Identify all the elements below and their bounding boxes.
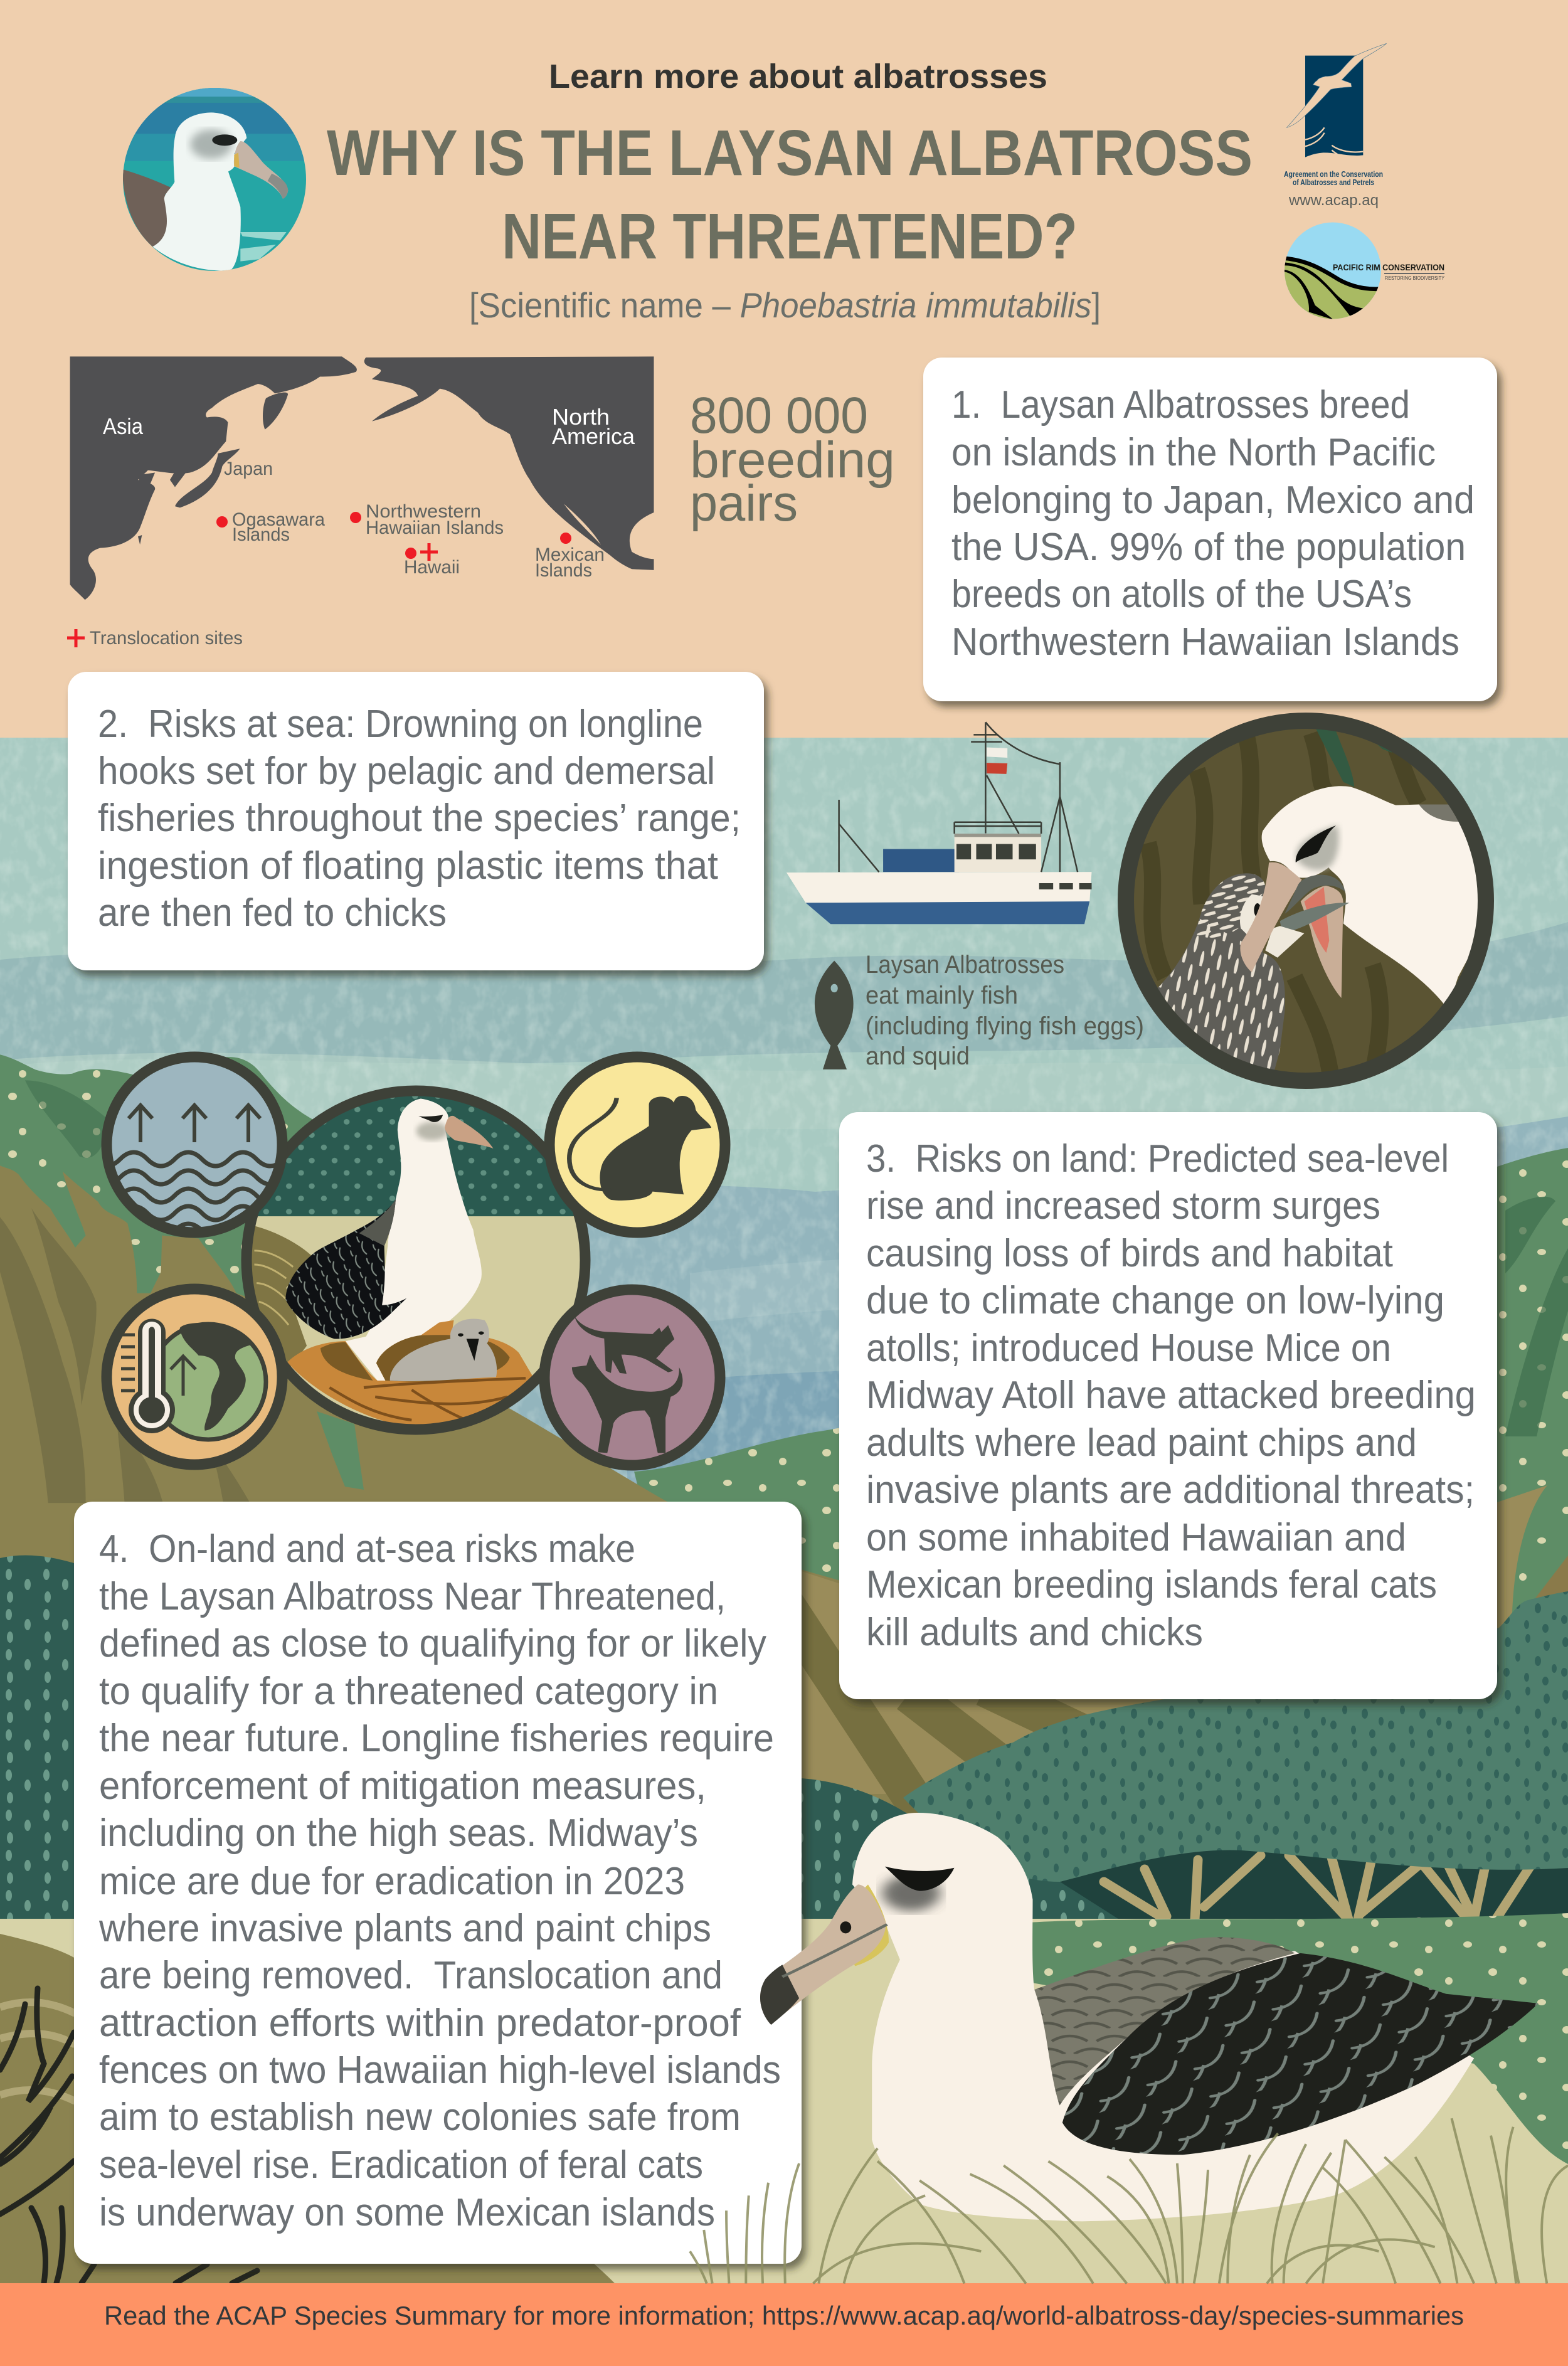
stat: breeding pairs: pairs (690, 475, 798, 532)
panel 3 text: atolls; introduced House Mice on (866, 1327, 1391, 1370)
map land (70, 356, 654, 600)
panel 2 text: ingestion of floating plastic items that (98, 844, 718, 888)
map legend: translocation sites: Translocation sites (90, 628, 243, 649)
map site: Mexican Islands (535, 533, 605, 581)
wing feathers (1062, 1953, 1539, 2155)
panel 3 text: Mexican breeding islands feral cats (866, 1563, 1437, 1606)
stat: breeding pairs: 800 000 (690, 387, 868, 444)
panel 4 text: aim to establish new colonies safe from (99, 2096, 741, 2139)
panel 1 text (951, 383, 1475, 664)
background: big teal dotted hill (903, 1591, 1568, 1882)
panel 3: risks on land (839, 1112, 1497, 1699)
panel 1 text: the USA. 99% of the population (951, 526, 1466, 569)
panel 4 text: sea-level rise. Eradication of feral cats (99, 2143, 703, 2187)
photo: albatross on water (121, 86, 307, 274)
bird eye (885, 1867, 954, 1891)
logo caption (1284, 169, 1383, 187)
footer bar (0, 2283, 1568, 2366)
logo: ACAP (1284, 43, 1387, 209)
bird body (852, 1813, 1474, 2221)
panel 3 text: on some inhabited Hawaiian and (866, 1516, 1406, 1559)
text: diet note: and squid (866, 1042, 970, 1070)
background: green drip under central circle (317, 1411, 364, 1490)
logo url: www.acap.aq (1288, 192, 1379, 209)
map site: Mexican Islands: Mexican (535, 544, 605, 565)
text: diet note: eat mainly fish (866, 982, 1018, 1009)
panel 3 text: adults where lead paint chips and (866, 1421, 1417, 1465)
panel 1 text: belonging to Japan, Mexico and (951, 479, 1475, 522)
heading: learn more: Learn more about albatrosses (549, 58, 1047, 95)
logo tagline: RESTORING BIODIVERSITY (1385, 275, 1445, 281)
panel 3 text: due to climate change on low-lying (866, 1279, 1444, 1322)
panel 2 text (98, 703, 741, 935)
background: tree trunks (1104, 1850, 1530, 1919)
map site: Northwestern Hawaiian Islands (350, 501, 504, 538)
text: diet note (866, 951, 1144, 1070)
panel 1 text: 1. Laysan Albatrosses breed (951, 383, 1410, 427)
panel 4 text: are being removed. Translocation and (99, 1954, 723, 1997)
background: sand header (0, 0, 1568, 738)
logo caption: Agreement on the Conservation (1284, 169, 1383, 179)
map label: North America: America (552, 423, 635, 449)
illustration: large albatross (760, 1813, 1539, 2221)
background: olive hill with black branches (0, 1932, 627, 2289)
background: pale ground (0, 1919, 1568, 2289)
panel 2: risks at sea (68, 672, 764, 970)
title: WHY IS THE LAYSAN ALBATROSS (327, 117, 1253, 189)
icon: mouse (549, 1057, 725, 1233)
logo: Pacific Rim Conservation (1285, 222, 1445, 322)
panel 4 text: is underway on some Mexican islands (99, 2191, 715, 2234)
map site: Northwestern Hawaiian Islands: Northwestern (366, 501, 481, 522)
panel 4 text (98, 1527, 781, 2234)
panel 4 text: defined as close to qualifying for or likely (99, 1622, 766, 1665)
icon: fish (815, 961, 854, 1069)
panel 4 text: where invasive plants and paint chips (98, 1907, 711, 1950)
icon: waves (114, 1150, 275, 1227)
logo caption: of Albatrosses and Petrels (1293, 178, 1374, 187)
title: NEAR THREATENED? (502, 200, 1078, 272)
panel 3 text: 3. Risks on land: Predicted sea-level (866, 1137, 1449, 1180)
panel 4 text: including on the high seas. Midway’s (99, 1812, 698, 1855)
illustration: central albatross on nest (238, 1079, 596, 1437)
background: green hill right (634, 1148, 1568, 1694)
map site: Hawaii: Hawaii (404, 557, 460, 578)
panel 2 text: hooks set for by pelagic and demersal (98, 750, 715, 793)
logo name: PACIFIC RIM CONSERVATION (1333, 262, 1444, 272)
bird mantle (1034, 1937, 1295, 2106)
panel 4 text: the near future. Longline fisheries require (99, 1717, 774, 1760)
text: diet note: Laysan Albatrosses (866, 951, 1064, 979)
map label: North America: North (552, 404, 610, 430)
background: brown striped hill (0, 1165, 1164, 1814)
bird beak (760, 1884, 889, 2025)
background: left dark green hillside (0, 1555, 125, 1920)
background: mid green bush (1029, 1913, 1568, 2164)
bird head shading (882, 1875, 940, 1911)
map site: Ogasawara Islands (216, 509, 325, 545)
bird wing (1062, 1953, 1539, 2155)
panel 3 text: invasive plants are additional threats; (866, 1468, 1475, 1512)
foreground: grass blades (690, 2118, 1568, 2283)
map site: Hawaii (404, 543, 460, 578)
illustration: adult feeding chick (1116, 709, 1499, 1091)
panel 4 text: fences on two Hawaiian high-level islands (99, 2049, 781, 2092)
panel 2 text: 2. Risks at sea: Drowning on longline (98, 703, 703, 746)
panel 4 text: to qualify for a threatened category in (99, 1670, 718, 1713)
map site: Mexican Islands: Islands (535, 560, 592, 581)
footer link text: Read the ACAP Species Summary for more information; https://www.acap.aq/world-albatross-day/species-summaries (104, 2301, 1464, 2330)
map label: North America (552, 404, 635, 449)
background: green hill left (0, 1054, 314, 1297)
map site: Ogasawara Islands: Ogasawara (232, 509, 325, 530)
panel 4 text: attraction efforts within predator-proof (99, 2002, 741, 2045)
panel 4 text: mice are due for eradication in 2023 (99, 1860, 685, 1903)
stat: breeding pairs (690, 387, 895, 532)
icon: fishing boat (787, 722, 1092, 924)
panel 3 text: Midway Atoll have attacked breeding (866, 1374, 1476, 1417)
map site: Ogasawara Islands: Islands (232, 524, 290, 545)
background: dark forest under trees (1060, 1844, 1568, 1926)
panel 1 text: Northwestern Hawaiian Islands (951, 620, 1459, 664)
icon: global warming (107, 1289, 282, 1465)
panel 1 text: breeds on atolls of the USA’s (951, 573, 1412, 616)
panel 2 text: are then fed to chicks (98, 891, 447, 935)
panel 2 text: fisheries throughout the species’ range; (98, 797, 741, 840)
panel 1 text: on islands in the North Pacific (951, 431, 1436, 474)
icon: cat and dog (544, 1290, 720, 1465)
panel 3 text (866, 1137, 1476, 1654)
scientific name: [Scientific name – Phoebastria immutabilis] (469, 285, 1101, 325)
background: dark green hillside near bird (802, 1778, 1192, 1920)
panel 1: breeding (923, 358, 1497, 701)
panel 3 text: kill adults and chicks (866, 1611, 1203, 1654)
title (327, 117, 1253, 272)
panel 4 text: the Laysan Albatross Near Threatened, (99, 1575, 726, 1618)
icon: rising arrows (129, 1105, 260, 1142)
panel 4 text: enforcement of mitigation measures, (99, 1764, 706, 1808)
map label: Japan: Japan (224, 459, 273, 479)
panel 3 text: causing loss of birds and habitat (866, 1232, 1393, 1275)
panel 4: conclusions (74, 1502, 802, 2264)
icon: sea-level rise (102, 1051, 287, 1238)
panel 3 text: rise and increased storm surges (866, 1184, 1380, 1228)
map label: Asia: Asia (103, 413, 144, 439)
map site: Northwestern Hawaiian Islands: Hawaiian Islands (366, 517, 504, 538)
background: brown sliver right (1497, 1485, 1568, 1631)
stat: breeding pairs: breeding (690, 432, 895, 489)
background: sea (0, 738, 1568, 1628)
text: diet note: (including flying fish eggs) (866, 1012, 1144, 1040)
panel 4 text: 4. On-land and at-sea risks make (99, 1527, 635, 1571)
map: North Pacific (67, 356, 654, 649)
